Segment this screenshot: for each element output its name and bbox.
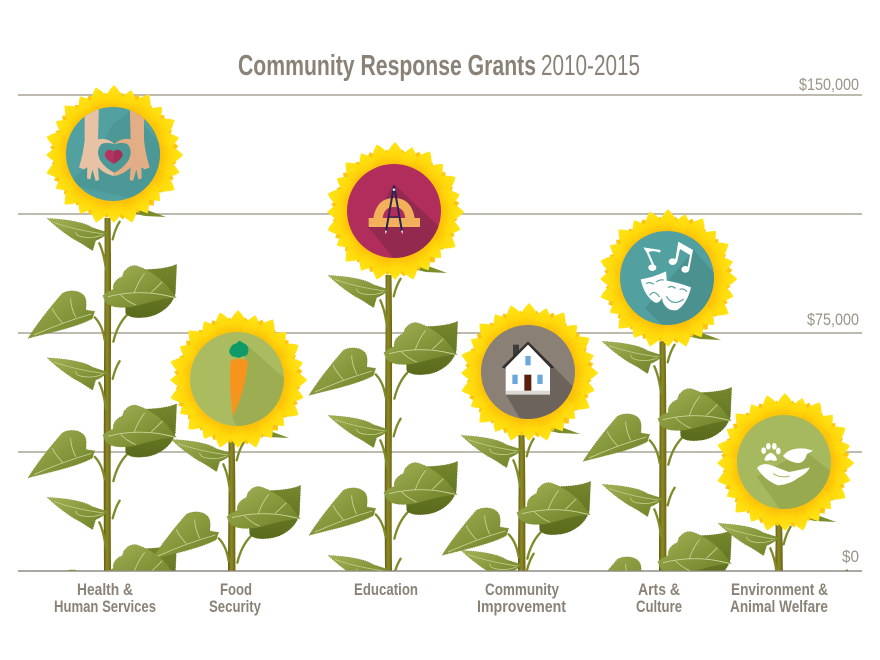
category labels: Arts & [638, 581, 680, 599]
plant: food security [152, 431, 301, 571]
icon: hands forming a heart [73, 109, 160, 198]
category labels: Human Services [54, 598, 156, 616]
axis labels: $75,000 [807, 310, 859, 329]
category labels: Education [354, 581, 418, 599]
title: Community Response Grants [238, 50, 536, 82]
axis labels: $0 [842, 547, 859, 566]
plant: health and human services [28, 210, 177, 570]
category labels: Improvement [477, 598, 566, 616]
flower: food security [168, 310, 307, 450]
flower: education [325, 142, 464, 282]
flower: environment and animal welfare [715, 393, 854, 533]
category labels: Environment & [731, 581, 828, 599]
category labels: Health & [77, 581, 133, 599]
category labels: Food [220, 581, 252, 599]
category labels: Animal Welfare [730, 598, 828, 616]
axis labels: $150,000 [799, 75, 859, 94]
icon: theatre masks and music notes [640, 242, 714, 325]
category labels: Community [485, 581, 560, 599]
axis labels [799, 75, 859, 566]
flower: community improvement [459, 303, 598, 443]
category labels: Security [209, 598, 262, 616]
icon: paw, leaf and hand [757, 443, 830, 509]
plant: environment and animal welfare [718, 516, 848, 570]
flower: health and human services [44, 85, 183, 225]
icon: protractor and compass [368, 184, 438, 258]
gridlines [18, 95, 862, 571]
icon: carrot [229, 341, 284, 426]
flower: arts and culture [598, 209, 737, 349]
category labels: Culture [636, 598, 682, 616]
plant: education [308, 266, 458, 570]
plant: arts and culture [582, 333, 732, 570]
icon: house [502, 342, 573, 419]
category labels [54, 581, 828, 616]
title: 2010-2015 [541, 50, 640, 82]
plant: community improvement [442, 428, 591, 570]
